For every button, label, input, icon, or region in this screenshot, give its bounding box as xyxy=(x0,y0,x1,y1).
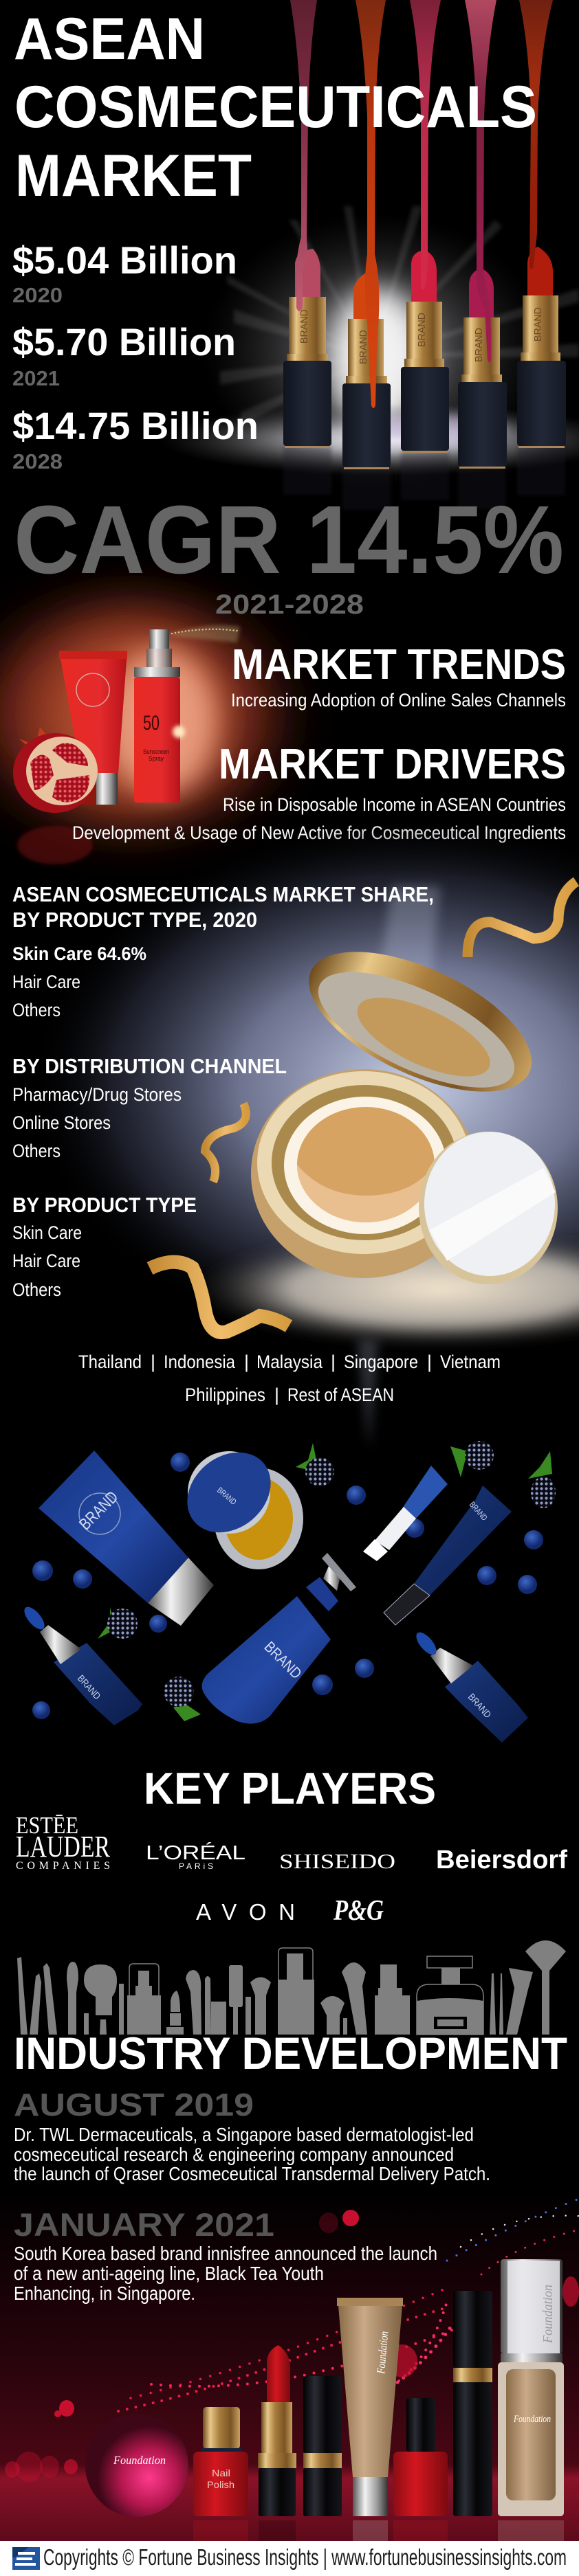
illustration: blue skincare products xyxy=(21,1434,556,1743)
by product type: Others xyxy=(12,1279,61,1300)
large tube: BRAND xyxy=(76,1488,122,1534)
red backdrop xyxy=(0,2192,579,2541)
title: ASEAN xyxy=(14,6,205,72)
countries xyxy=(78,1352,501,1405)
market trends xyxy=(231,641,566,710)
lipstick red xyxy=(258,2345,296,2516)
countries: Philippines xyxy=(185,1385,265,1405)
key players heading: KEY PLAYERS xyxy=(144,1763,436,1813)
countries: | xyxy=(427,1352,432,1372)
market size stats: $5.70 Billion xyxy=(12,320,236,363)
black compact tube xyxy=(303,2376,342,2516)
ribbons xyxy=(150,882,576,1332)
by distribution channel: Online Stores xyxy=(12,1112,111,1133)
hero illustration: lipsticks xyxy=(158,0,579,510)
jar xyxy=(171,1434,303,1569)
compact base xyxy=(251,1069,477,1278)
bokeh lights xyxy=(5,2210,579,2482)
nail polish red xyxy=(193,2407,248,2516)
by product type: Skin Care xyxy=(12,1222,82,1243)
by distribution channel: BY DISTRIBUTION CHANNEL xyxy=(12,1054,287,1078)
nail polish red: Polish xyxy=(207,2479,234,2490)
development: August 2019: Dr. TWL Dermaceuticals, a Singapore based dermatologist-led xyxy=(14,2124,474,2145)
market drivers xyxy=(72,741,566,843)
lipstick 4 xyxy=(458,268,507,509)
pump bottle xyxy=(202,1553,356,1724)
title xyxy=(14,6,537,209)
logo: Beiersdorf: Beiersdorf xyxy=(436,1846,567,1874)
logo: Avon: AVON xyxy=(196,1899,295,1925)
lipstick 1: BRAND xyxy=(298,309,310,344)
lipstick 3: BRAND xyxy=(416,313,428,347)
development: January 2021: South Korea based brand innisfree announced the launch xyxy=(14,2243,437,2264)
powder puff xyxy=(419,1132,558,1284)
vial xyxy=(363,1466,448,1561)
mascara xyxy=(453,2291,492,2516)
countries: Thailand xyxy=(78,1352,142,1372)
right serum dropper xyxy=(413,1629,528,1743)
market size stats: $5.04 Billion xyxy=(12,238,237,282)
eye gel tube: BRAND xyxy=(468,1500,490,1523)
development: January 2021: JANUARY 2021 xyxy=(14,2206,274,2243)
foundation bottle: Foundation xyxy=(540,2285,556,2344)
lipstick 1 xyxy=(283,249,331,495)
makeup tools silhouette row xyxy=(17,1940,566,2035)
title: COSMECEUTICALS xyxy=(14,74,537,140)
development: August 2019: the launch of Qraser Cosmeceutical Transdermal Delivery Patch. xyxy=(14,2163,490,2184)
red glow: sun care products xyxy=(0,605,278,825)
by product type: Hair Care xyxy=(12,1251,80,1271)
logo: L'Oreal: L’ORÉAL xyxy=(146,1841,245,1864)
spray bottle: Spray xyxy=(149,755,164,762)
large tube xyxy=(39,1451,214,1626)
lipstick 4: BRAND xyxy=(473,328,485,362)
lipstick 5 xyxy=(517,247,566,495)
market share by product type: Others xyxy=(12,1000,61,1020)
by product type: BY PRODUCT TYPE xyxy=(12,1193,197,1217)
market share by product type: BY PRODUCT TYPE, 2020 xyxy=(12,908,257,932)
lipstick drips xyxy=(290,0,553,408)
nail polish red: Nail xyxy=(212,2467,230,2478)
eye gel tube xyxy=(384,1486,512,1625)
lipstick 2 xyxy=(342,270,391,510)
logo: Estee Lauder: LAUDER xyxy=(16,1830,110,1863)
foundation bottle xyxy=(498,2259,564,2516)
pomegranate xyxy=(13,727,98,864)
CAGR: 2021-2028 xyxy=(215,590,364,620)
right serum dropper: BRAND xyxy=(466,1691,494,1720)
logo: Estee Lauder xyxy=(16,1812,110,1872)
countries: | xyxy=(274,1385,279,1405)
tube xyxy=(59,651,127,805)
development: January 2021: of a new anti-ageing line, Black Tea Youth xyxy=(14,2263,324,2284)
left serum dropper: BRAND xyxy=(76,1672,103,1701)
compact egg xyxy=(85,2414,188,2517)
dotted light waves xyxy=(118,2199,579,2411)
development: August 2019: AUGUST 2019 xyxy=(14,2087,254,2123)
by distribution channel: Pharmacy/Drug Stores xyxy=(12,1084,182,1105)
market size stats: 2028 xyxy=(12,449,63,473)
market share by product type xyxy=(12,882,434,1020)
development: January 2021 xyxy=(14,2206,437,2304)
lipstick 3 xyxy=(401,250,449,500)
illustration: cushion compact xyxy=(28,818,579,1450)
spray bottle xyxy=(134,629,185,803)
market size stats xyxy=(12,238,259,473)
spray bottle: Sunscreen xyxy=(143,748,169,755)
studio light rays xyxy=(158,206,579,488)
by distribution channel xyxy=(12,1054,287,1161)
illustration: red cosmetics scene xyxy=(0,2192,579,2541)
market share by product type: ASEAN COSMECEUTICALS MARKET SHARE, xyxy=(12,882,434,906)
footer xyxy=(0,2541,579,2576)
development: August 2019: cosmeceutical research & engineering company announced xyxy=(14,2144,454,2165)
beige tube: Foundation xyxy=(374,2331,391,2375)
market share by product type: Skin Care 64.6% xyxy=(12,943,146,964)
development: August 2019 xyxy=(14,2087,490,2184)
countries: Vietnam xyxy=(440,1352,501,1372)
countries: | xyxy=(244,1352,249,1372)
floor reflections xyxy=(193,2520,564,2541)
blackberries xyxy=(98,1441,556,1721)
logo: Estee Lauder: COMPANIES xyxy=(16,1860,110,1872)
market share by product type: Hair Care xyxy=(12,972,80,992)
pump bottle: BRAND xyxy=(261,1638,305,1682)
foundation bottle: Foundation xyxy=(513,2414,551,2425)
countries: | xyxy=(331,1352,336,1372)
countries: Rest of ASEAN xyxy=(287,1385,394,1405)
spray bottle: 50 xyxy=(143,712,160,735)
by distribution channel: Others xyxy=(12,1141,61,1161)
by product type xyxy=(12,1193,197,1300)
compact egg: Foundation xyxy=(113,2454,166,2467)
market size stats: $14.75 Billion xyxy=(12,404,259,447)
spray mist xyxy=(170,625,240,642)
jar: BRAND xyxy=(215,1486,239,1507)
left serum dropper xyxy=(21,1604,142,1725)
logo: Estee Lauder: ESTĒE xyxy=(16,1812,78,1839)
compact lid xyxy=(289,923,551,1121)
countries: Malaysia xyxy=(256,1352,323,1372)
logo: L'Oreal xyxy=(146,1841,245,1871)
countries: Singapore xyxy=(344,1352,418,1372)
blueberries xyxy=(32,1453,543,1719)
logo: Shiseido: SHISEIDO xyxy=(279,1849,395,1873)
spotlight backdrop xyxy=(28,818,579,1450)
logo: L'Oreal: PARiS xyxy=(179,1861,213,1871)
title: MARKET xyxy=(15,143,252,209)
beige tube xyxy=(337,2298,403,2516)
lipstick 5: BRAND xyxy=(532,307,544,341)
lipstick 2: BRAND xyxy=(358,330,369,364)
illustration: sunscreen products xyxy=(13,625,240,864)
market size stats: 2021 xyxy=(12,366,60,390)
market size stats: 2020 xyxy=(12,283,63,307)
countries: Indonesia xyxy=(164,1352,236,1372)
countries: | xyxy=(151,1352,155,1372)
logo: Fortune Business Insights xyxy=(12,2547,40,2570)
nail polish black cap xyxy=(393,2398,448,2516)
logo: P&G: P&G xyxy=(333,1895,384,1927)
development: January 2021: Enhancing, in Singapore. xyxy=(14,2283,195,2304)
